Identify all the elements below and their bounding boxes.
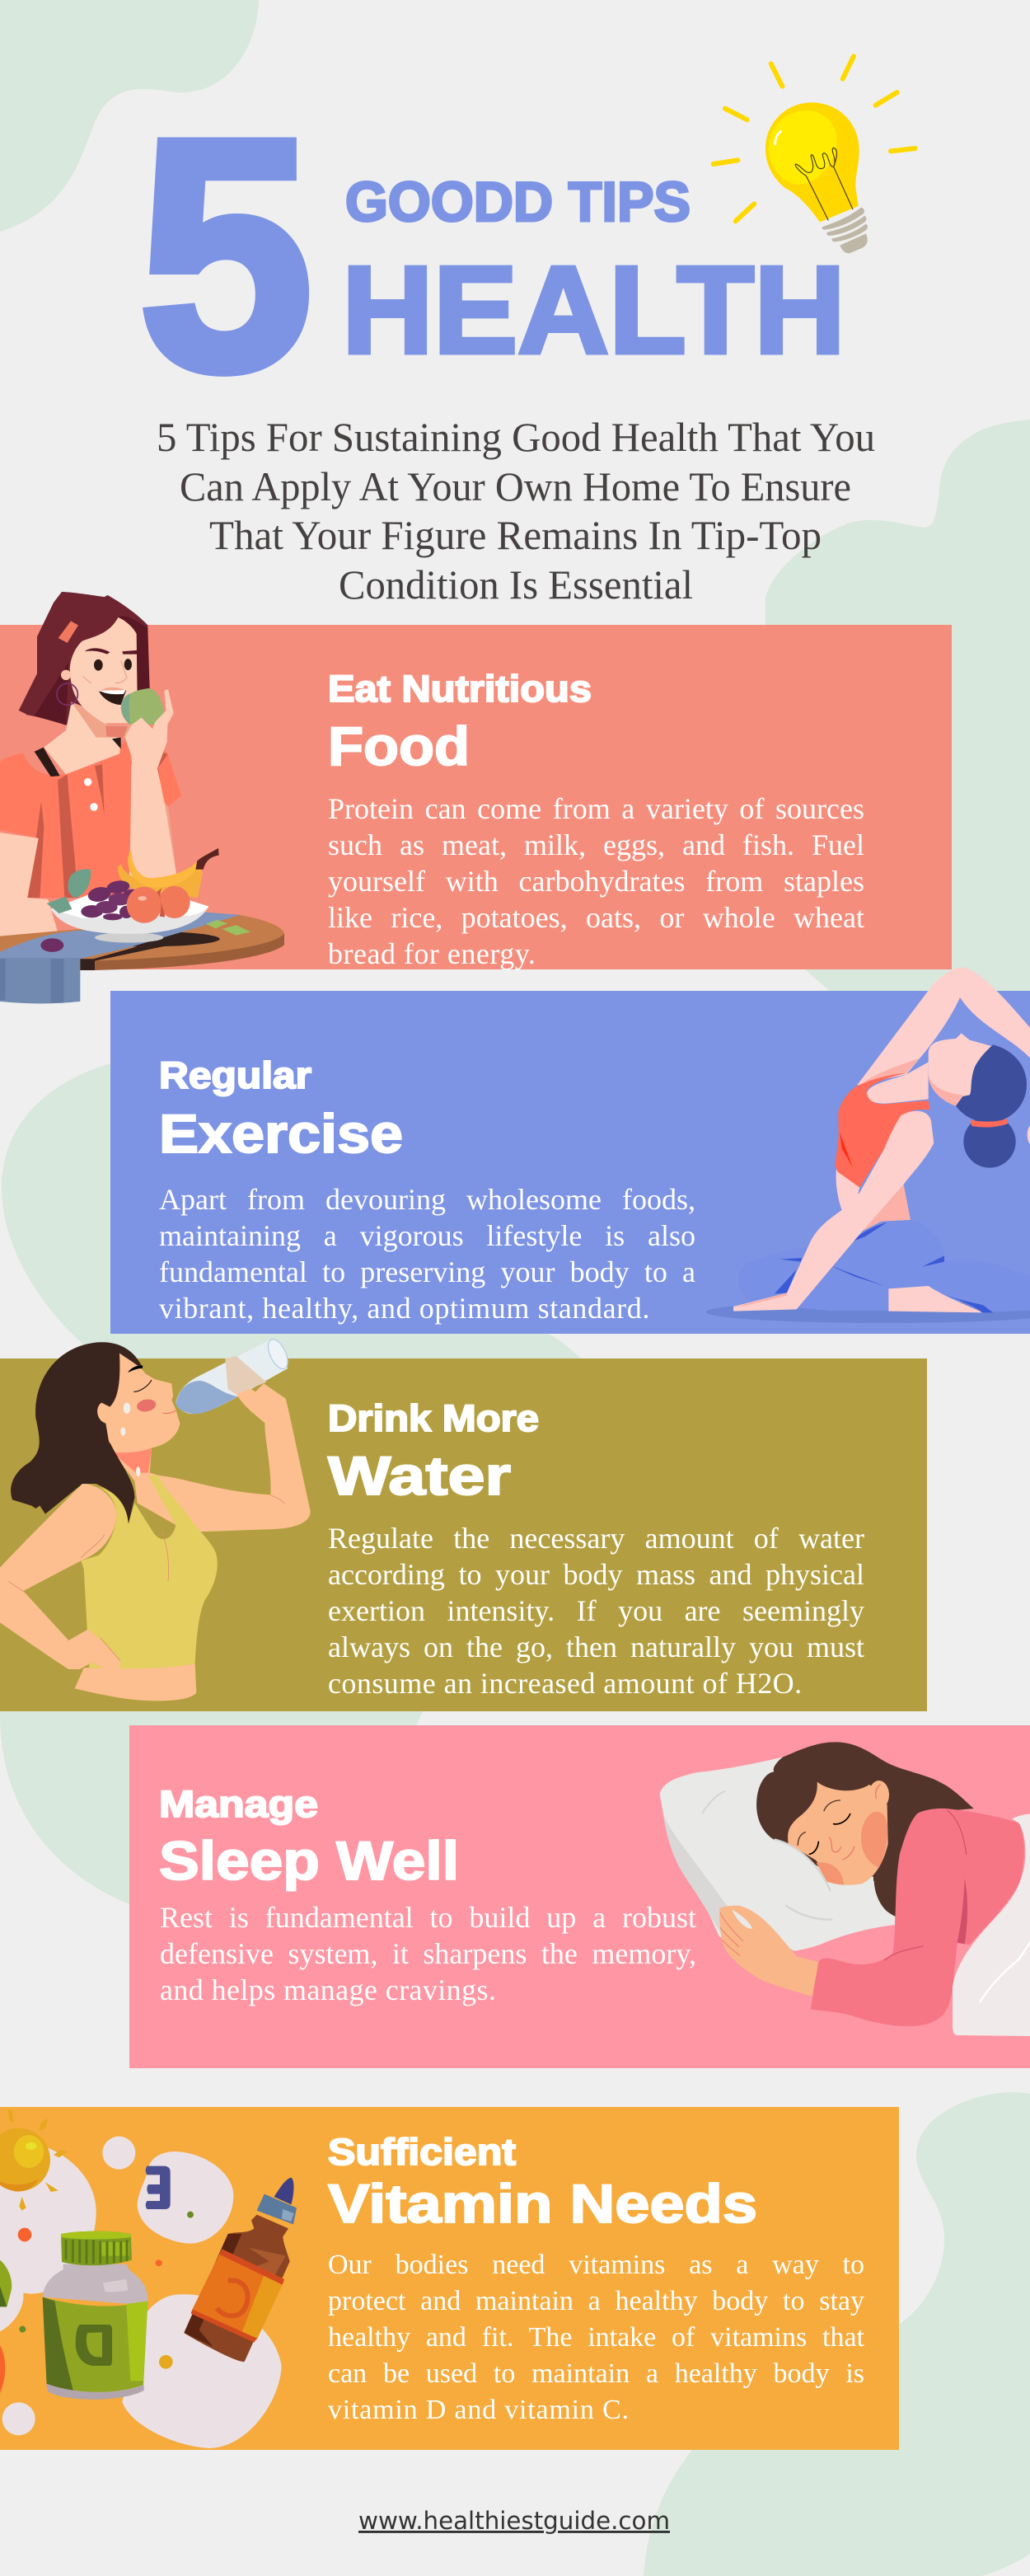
- body text: sleep: Rest is fundamental to build up a robust: [160, 1901, 696, 1934]
- body text: food: [328, 792, 864, 970]
- illustration: vitamin bottles: [0, 2109, 297, 2448]
- body text: vitamins: Our bodies need vitamins as a way to: [328, 2250, 864, 2280]
- body text: vitamins: protect and maintain a healthy body to stay: [328, 2286, 864, 2316]
- body text: water: [328, 1522, 864, 1700]
- heading: manage sleep well: [159, 1783, 459, 1891]
- panel: manage sleep well: [129, 1725, 1030, 2068]
- heading: sufficient vitamin needs: Vitamin Needs: [328, 2173, 757, 2234]
- title: 5 Goodd Tips Health: GOODD TIPS: [345, 171, 691, 233]
- body text: exercise: fundamental to preserving your body to a: [159, 1255, 695, 1288]
- body text: food: bread for energy.: [328, 937, 536, 970]
- body text: water: exertion intensity. If you are seemingly: [328, 1594, 864, 1627]
- subtitle text: Can Apply At Your Own Home To Ensure: [180, 463, 851, 509]
- footer: website link: www.healthiestguide.com: [358, 2507, 670, 2535]
- title: 5 Goodd Tips Health: HEALTH: [342, 240, 845, 379]
- panel: regular exercise: [110, 991, 1030, 1334]
- illustration: woman doing yoga: [705, 967, 1030, 1323]
- body text: vitamins: [328, 2250, 864, 2425]
- body text: vitamins: can be used to maintain a healthy body is: [328, 2358, 864, 2389]
- panel: eat nutritious food: [0, 625, 952, 969]
- heading: manage sleep well: Manage: [159, 1783, 318, 1825]
- heading: eat nutritious food: Eat Nutritious: [328, 668, 592, 710]
- title: 5 Goodd Tips Health: [138, 124, 845, 387]
- body text: water: consume an increased amount of H2O.: [328, 1667, 803, 1700]
- body text: food: Protein can come from a variety of sources: [328, 792, 864, 825]
- illustration: woman sleeping on pillow: [659, 1742, 1030, 2036]
- body text: vitamins: healthy and fit. The intake of vitamins that: [328, 2322, 864, 2353]
- body text: exercise: Apart from devouring wholesome foods,: [159, 1183, 695, 1216]
- heading: eat nutritious food: [328, 668, 592, 777]
- body text: food: such as meat, milk, eggs, and fish. Fuel: [328, 828, 864, 861]
- body text: water: Regulate the necessary amount of water: [328, 1522, 864, 1555]
- heading: eat nutritious food: Food: [328, 716, 470, 777]
- subtitle text: That Your Figure Remains In Tip-Top: [209, 512, 822, 558]
- body text: vitamins: vitamin D and vitamin C.: [328, 2395, 630, 2425]
- heading: manage sleep well: Sleep Well: [159, 1830, 459, 1891]
- heading: sufficient vitamin needs: [326, 2131, 757, 2234]
- heading: regular exercise: [159, 1054, 403, 1164]
- subtitle text: 5 Tips For Sustaining Good Health That You: [157, 414, 875, 460]
- body text: sleep: [160, 1901, 696, 2006]
- body text: water: always on the go, then naturally you must: [328, 1631, 864, 1663]
- body text: sleep: and helps manage cravings.: [160, 1973, 496, 2006]
- subtitle text: Condition Is Essential: [339, 561, 693, 608]
- body text: exercise: maintaining a vigorous lifestyle is also: [159, 1219, 695, 1252]
- illustration: woman drinking water: [0, 1339, 311, 1701]
- panel: drink more water: [0, 1358, 927, 1711]
- body text: water: according to your body mass and physical: [328, 1558, 864, 1591]
- heading: drink more water: Water: [328, 1445, 511, 1506]
- illustration: woman eating at table: [0, 592, 284, 1004]
- heading: drink more water: Drink More: [328, 1397, 539, 1439]
- body text: exercise: vibrant, healthy, and optimum standard.: [159, 1292, 650, 1325]
- heading: drink more water: [326, 1397, 539, 1506]
- subtitle text: [157, 414, 875, 608]
- body text: sleep: defensive system, it sharpens the memory,: [160, 1937, 696, 1970]
- heading: regular exercise: Regular: [159, 1054, 311, 1096]
- icon: light bulb: [710, 54, 918, 254]
- body text: exercise: [159, 1183, 695, 1325]
- heading: regular exercise: Exercise: [159, 1103, 403, 1164]
- panel: sufficient vitamin needs: [0, 2107, 899, 2450]
- body text: food: like rice, potatoes, oats, or whole wheat: [328, 901, 864, 934]
- body text: food: yourself with carbohydrates from staples: [328, 865, 864, 898]
- heading: sufficient vitamin needs: Sufficient: [328, 2131, 516, 2173]
